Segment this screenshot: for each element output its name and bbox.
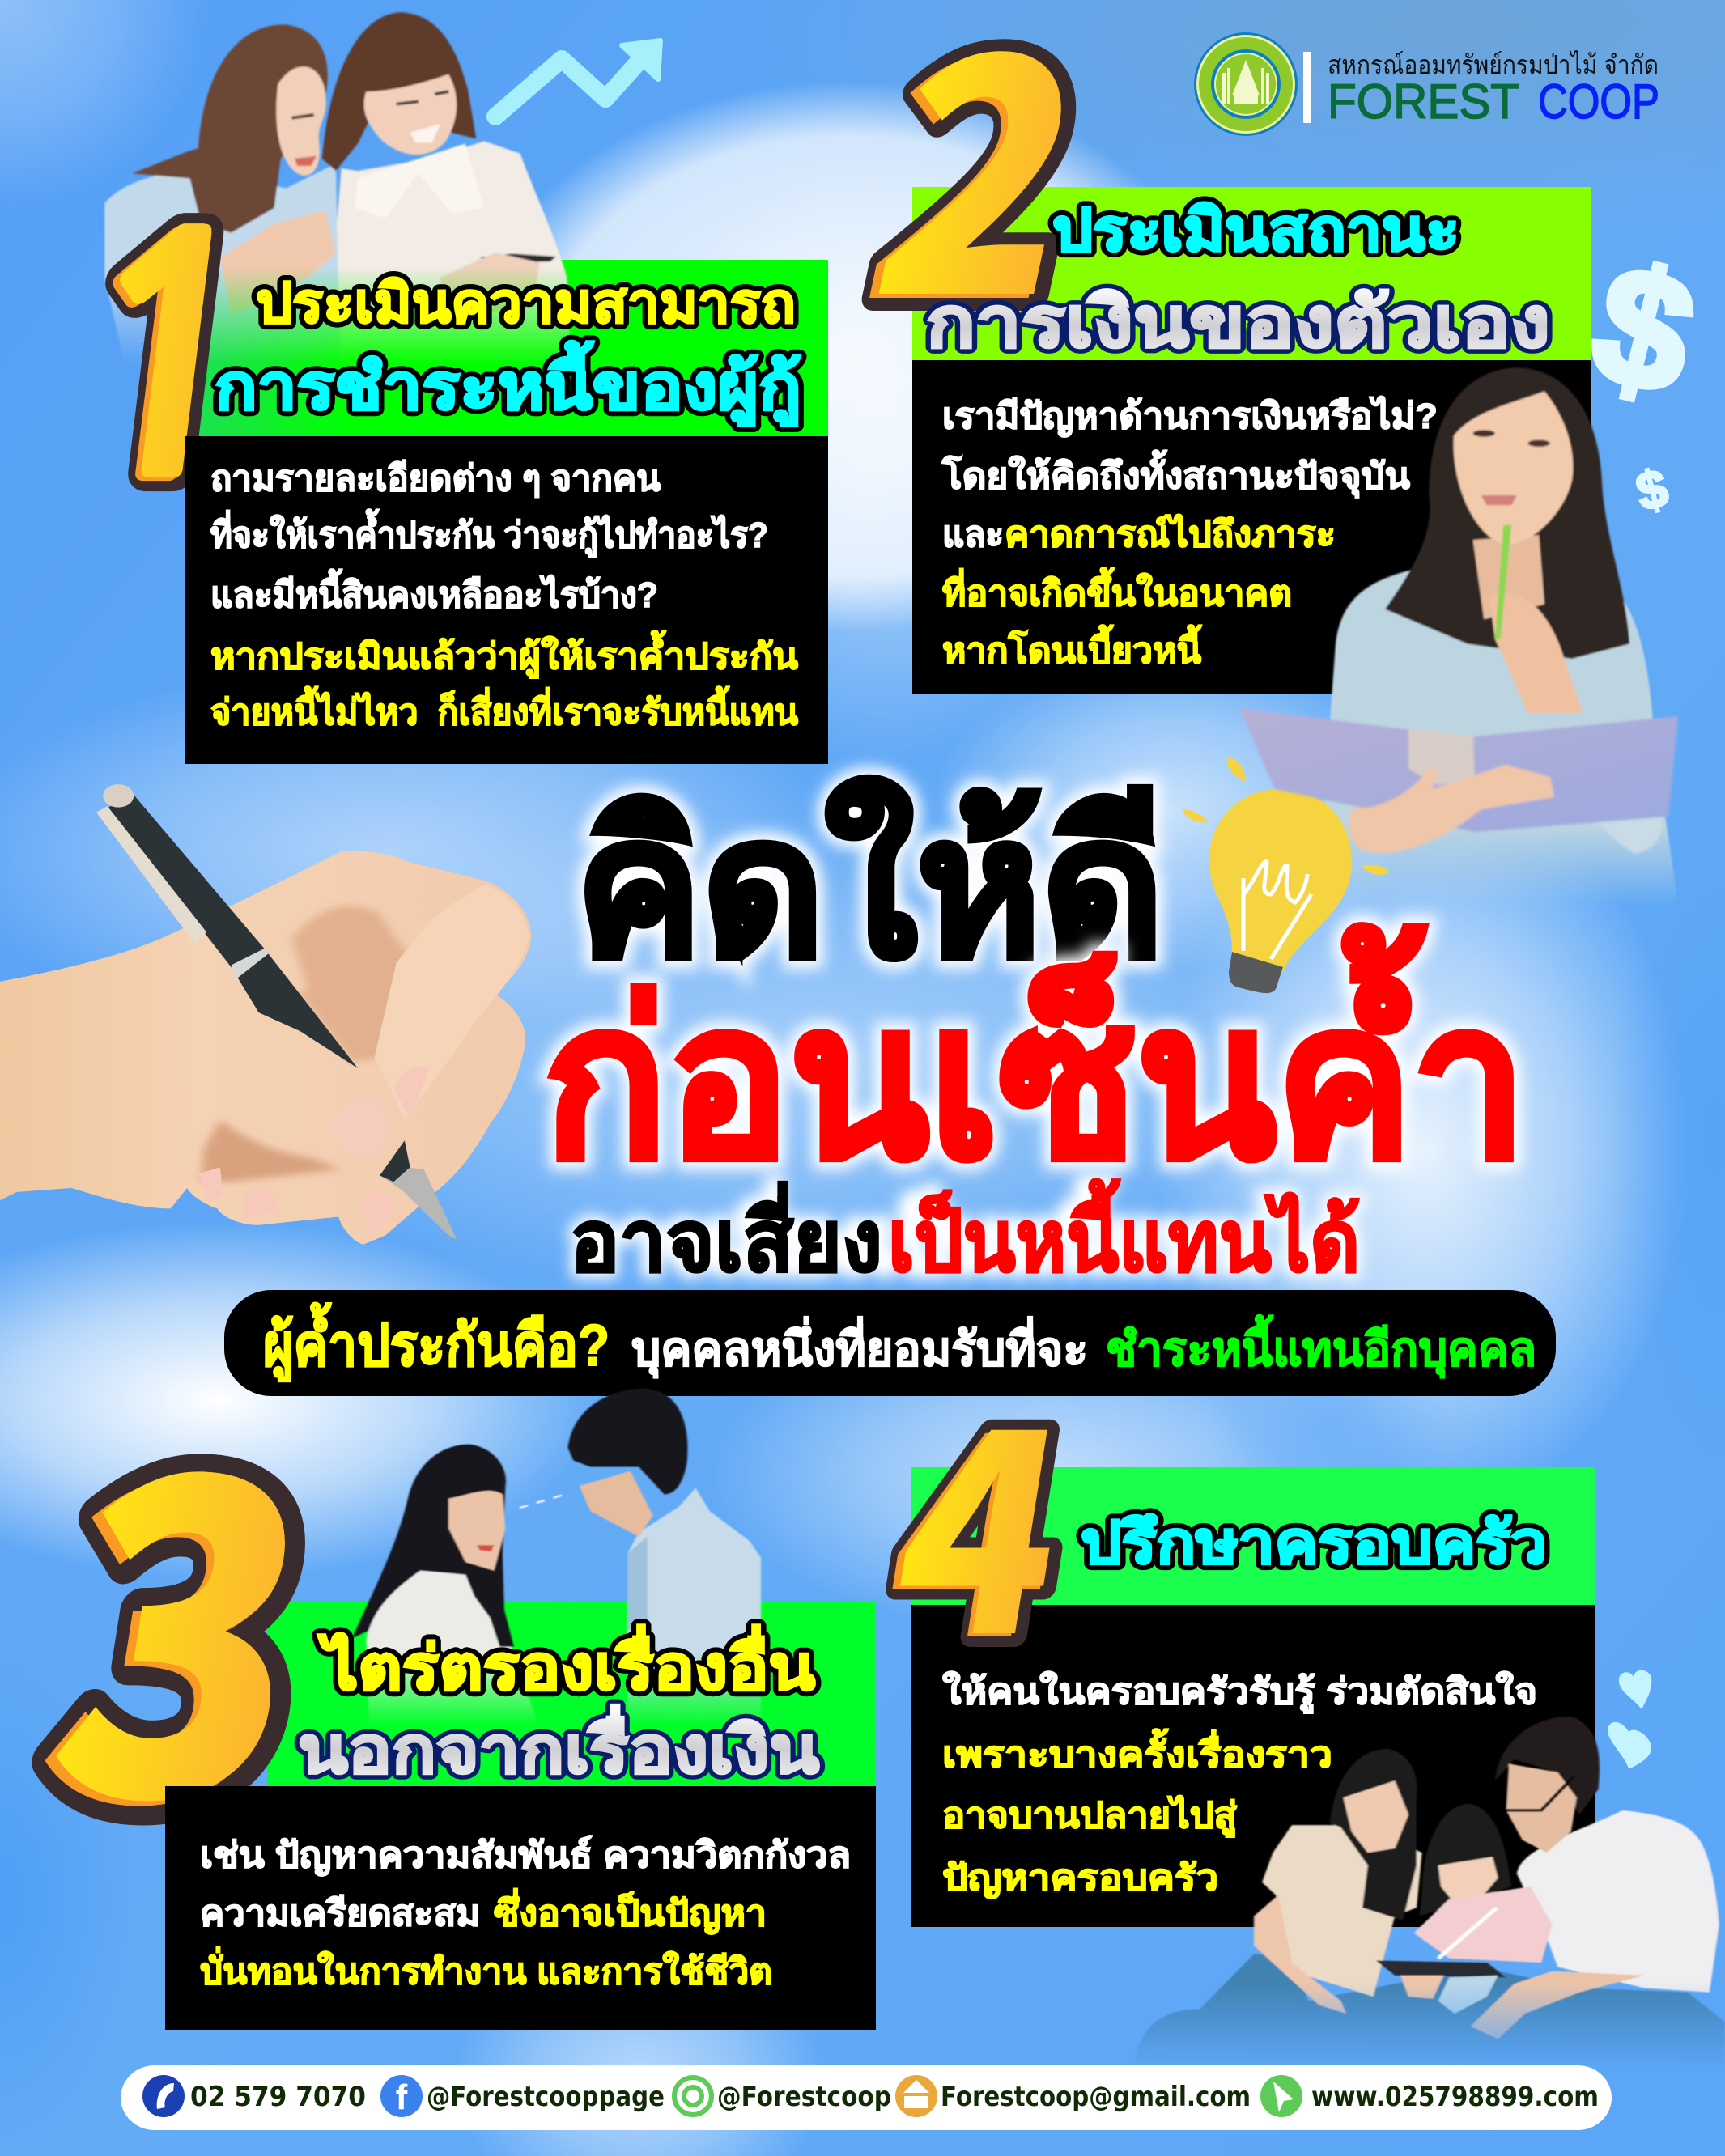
photo: arguing couple bbox=[352, 1389, 761, 1727]
panel 4 header bbox=[911, 1467, 1595, 1605]
title line 1: คิดให้ดี bbox=[576, 777, 1164, 996]
panel 3 body: ซึ่งอาจเป็นปัญหา bbox=[494, 1888, 767, 1934]
panel 1 heading bbox=[215, 273, 801, 427]
number 4: 4 bbox=[874, 1309, 1094, 1714]
panel 1 heading: การชำระหนี้ของผู้กู้ bbox=[215, 341, 801, 427]
icons: dollar signs: $ bbox=[1630, 457, 1674, 522]
icons: hearts bbox=[1608, 1670, 1651, 1769]
definition pill: ชำระหนี้แทนอีกบุคคล bbox=[1106, 1315, 1536, 1379]
panel 1 body: หากประเมินแล้วว่าผู้ให้เราค้ำประกัน bbox=[210, 630, 798, 678]
title line 1: คิดให้ดี bbox=[576, 777, 1164, 996]
contact bar: www.025798899.com bbox=[1311, 2081, 1599, 2113]
icon: mail bbox=[895, 2075, 937, 2117]
contact bar: @Forestcooppage bbox=[427, 2081, 665, 2113]
definition pill: ผู้ค้ำประกันคือ? bbox=[263, 1302, 610, 1382]
panel 4 body text bbox=[942, 1670, 1537, 1899]
icon: facebook: f bbox=[396, 2077, 408, 2117]
panel 2 body box bbox=[912, 360, 1591, 694]
icon: line at-sign bbox=[674, 2077, 712, 2115]
panel 2 heading: การเงินของตัวเอง bbox=[926, 284, 1550, 362]
panel 1 green header bbox=[193, 260, 828, 436]
logo: สหกรณ์ออมทรัพย์กรมป่าไม้ จำกัด bbox=[1328, 50, 1659, 79]
number 4: 4 bbox=[866, 1313, 1090, 1717]
panel 4 body text: อาจบานปลายไปสู่ bbox=[942, 1794, 1237, 1837]
definition pill: บุคคลหนึ่งที่ยอมรับที่จะ bbox=[631, 1316, 1088, 1379]
panel 1 body: ที่จะให้เราค้ำประกัน ว่าจะกู้ไปทำอะไร? bbox=[210, 508, 768, 557]
panel 3 body: ความเครียดสะสม bbox=[200, 1894, 480, 1933]
panel 1 heading: การชำระหนี้ของผู้กู้ bbox=[215, 341, 801, 427]
panel 3 heading: ไตร่ตรองเรื่องอื่น bbox=[317, 1624, 815, 1703]
panel 3 heading: ไตร่ตรองเรื่องอื่น bbox=[317, 1624, 815, 1703]
panel 2 body text: คาดการณ์ไปถึงภาระ bbox=[1005, 513, 1336, 554]
icon: web cursor bbox=[1260, 2075, 1302, 2117]
icon: facebook bbox=[380, 2075, 423, 2117]
number 1: 1 bbox=[46, 203, 279, 524]
icon: light bulb bbox=[1182, 749, 1389, 993]
panel 1 body: และมีหนี้สินคงเหลืออะไรบ้าง? bbox=[210, 568, 658, 615]
panel 3 body: เช่น ปัญหาความสัมพันธ์ ความวิตกกังวล bbox=[200, 1835, 851, 1876]
panel 2 body text: หากโดนเบี้ยวหนี้ bbox=[942, 624, 1202, 671]
title line 2: ก่อนเซ็นค้ำ bbox=[544, 924, 1527, 1202]
panel 1 heading: ประเมินความสามารถ bbox=[256, 273, 796, 334]
photo: writing hand with pen bbox=[0, 784, 531, 1245]
panel 4 body box bbox=[911, 1605, 1595, 1927]
logo bbox=[1194, 32, 1659, 136]
icons: dollar signs bbox=[1577, 229, 1711, 522]
panel 3 header bbox=[267, 1602, 876, 1786]
photo: open book and hand bbox=[1239, 708, 1678, 854]
title bbox=[544, 777, 1527, 1289]
panel 2 heading: การเงินของตัวเอง bbox=[926, 284, 1550, 362]
panel 2 body text: เรามีปัญหาด้านการเงินหรือไม่? bbox=[942, 395, 1438, 437]
title line 3: เป็นหนี้แทนได้ bbox=[888, 1178, 1360, 1289]
logo: FOREST bbox=[1328, 74, 1519, 129]
photo: family with tablet bbox=[1135, 1717, 1725, 2072]
panel 1 body bbox=[185, 436, 828, 764]
icons: dollar signs: $ bbox=[1577, 229, 1711, 431]
number 3: 3 bbox=[9, 1294, 352, 1926]
panel 2 body text: โดยให้คิดถึงทั้งสถานะปัจจุบัน bbox=[941, 449, 1410, 499]
panel 2 body text bbox=[941, 395, 1438, 671]
panel 2 heading bbox=[926, 198, 1550, 362]
panel 4 body text: ปัญหาครอบครัว bbox=[942, 1858, 1218, 1899]
panel 2 header bbox=[912, 187, 1591, 360]
panel 3 body: บั่นทอนในการทำงาน และการใช้ชีวิต bbox=[200, 1946, 772, 1992]
panel 4 body text: เพราะบางครั้งเรื่องราว bbox=[942, 1728, 1332, 1775]
number 1: 1 bbox=[54, 200, 283, 521]
logo: COOP bbox=[1538, 74, 1659, 129]
contact bar bbox=[121, 2065, 1612, 2130]
title line 3: อาจเสี่ยง bbox=[570, 1182, 882, 1289]
icon: rising arrow bbox=[495, 40, 661, 117]
number 3: 3 bbox=[20, 1289, 357, 1921]
contact bar: Forestcoop@gmail.com bbox=[941, 2081, 1251, 2113]
contact bar: 02 579 7070 bbox=[190, 2081, 366, 2113]
panel 1 heading: ประเมินความสามารถ bbox=[256, 273, 796, 334]
photo: two women bbox=[104, 12, 572, 397]
contact bar: @Forestcoop bbox=[717, 2081, 891, 2113]
panel 1 body: ถามรายละเอียดต่าง ๆ จากคน bbox=[210, 459, 661, 499]
panel 4 heading: ปรึกษาครอบครัว bbox=[1081, 1511, 1547, 1576]
panel 2 heading: ประเมินสถานะ bbox=[1052, 198, 1459, 263]
icon: phone bbox=[142, 2075, 185, 2117]
panel 3 heading: นอกจากเรื่องเงิน bbox=[298, 1704, 819, 1786]
panel 4 heading: ปรึกษาครอบครัว bbox=[1081, 1511, 1547, 1576]
panel 3 body bbox=[165, 1786, 876, 2030]
panel 2 body text: ที่อาจเกิดขึ้นในอนาคต bbox=[942, 567, 1292, 613]
number 4: 4 bbox=[871, 1311, 1095, 1716]
panel 3 heading: นอกจากเรื่องเงิน bbox=[298, 1704, 819, 1786]
definition pill bbox=[224, 1290, 1556, 1396]
panel 3 heading bbox=[298, 1624, 819, 1786]
panel 2 heading: ประเมินสถานะ bbox=[1052, 198, 1459, 263]
panel 1 body: จ่ายหนี้ไม่ไหว ก็เสี่ยงที่เราจะรับหนี้แทน bbox=[210, 685, 798, 732]
title line 3: อาจเสี่ยงเป็นหนี้แทนได้ bbox=[570, 1178, 1360, 1289]
title line 2: ก่อนเซ็นค้ำ bbox=[544, 924, 1527, 1202]
panel 2 body text: และ bbox=[942, 515, 1004, 554]
panel 4 body text: ให้คนในครอบครัวรับรู้ ร่วมตัดสินใจ bbox=[942, 1670, 1537, 1713]
photo: thinking woman with book bbox=[1323, 367, 1676, 899]
number 1: 1 bbox=[51, 202, 284, 523]
number 3: 3 bbox=[15, 1292, 359, 1925]
